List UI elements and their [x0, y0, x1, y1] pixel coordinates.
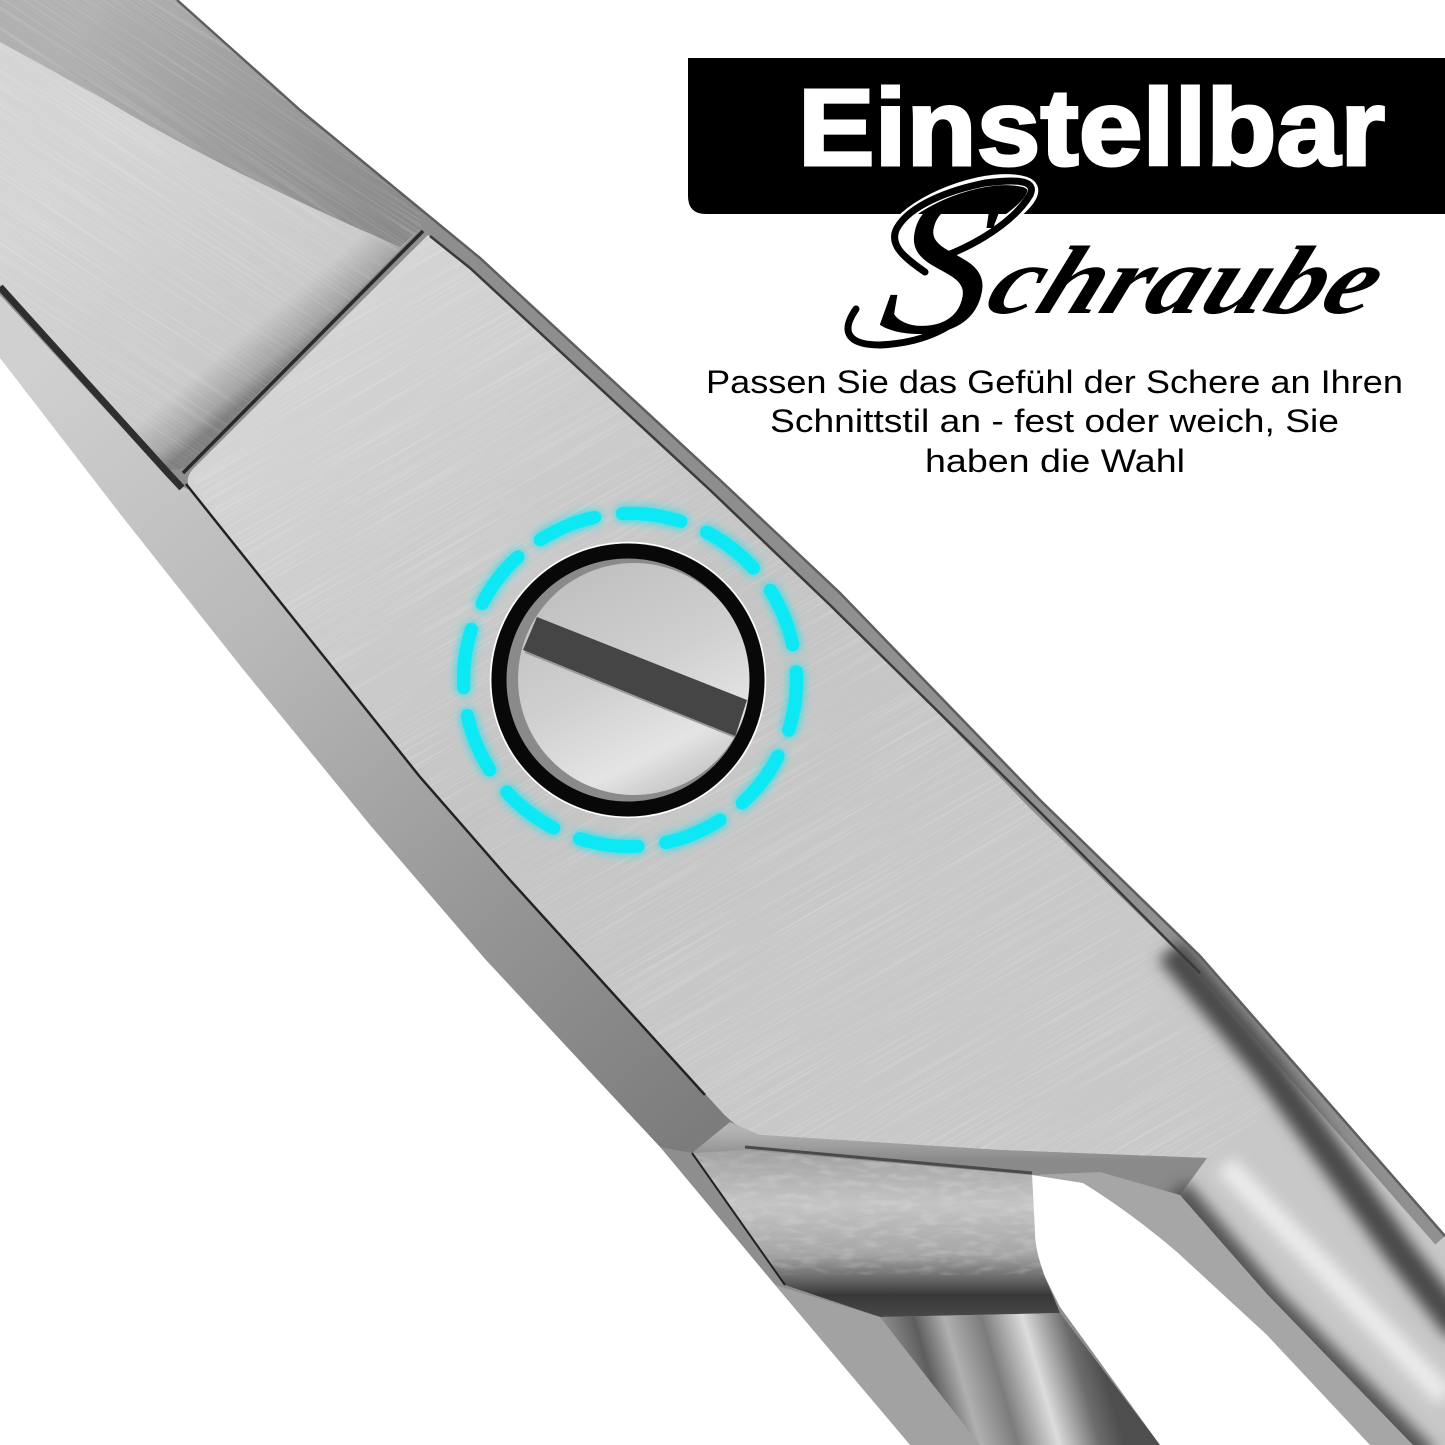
right handle inner bevel: [1032, 1172, 1413, 1445]
screw slot highlight: [525, 652, 735, 737]
title text: Einstellbar: [798, 67, 1385, 189]
strip below plate: [692, 1122, 1207, 1195]
blade ridge line: [183, 231, 423, 473]
lower valley shadow: [1175, 1190, 1425, 1445]
adjustable screw: [490, 542, 766, 818]
thin white ring highlight: [490, 542, 766, 818]
outer grey strip: [939, 714, 1445, 1244]
blade flat surface: [0, 42, 421, 470]
left handle outer bevel: [775, 1285, 980, 1445]
blade brushed texture: [0, 0, 421, 469]
plate lower edge line: [186, 484, 705, 1095]
script lowercase letters: chraube: [973, 228, 1401, 335]
top edge outer line: [177, 0, 1445, 1236]
description line 2: Schnittstil an - fest oder weich, Sie: [770, 403, 1339, 439]
screw head face: [518, 563, 750, 795]
script tail flourish: [848, 305, 968, 345]
wedge hammered texture: [696, 1154, 1044, 1275]
lower left bevel facet: [0, 295, 745, 1153]
plate upper inset dark line: [430, 236, 1200, 973]
blade groove dark line: [0, 287, 182, 488]
textured wedge below the plate: [692, 1150, 1060, 1317]
screw slot: [523, 617, 747, 737]
script capital S: S: [868, 149, 1016, 377]
right arm shading: [939, 714, 1445, 1445]
wedge outer dark edge: [692, 1153, 785, 1285]
title banner: [688, 58, 1445, 214]
upper blade dark bevel: [0, 0, 421, 247]
right handle arm: [1150, 925, 1445, 1445]
cyan dashed highlight ring: [456, 506, 804, 854]
central highlight: [1225, 1165, 1445, 1397]
upper dark shadow: [1170, 950, 1445, 1330]
screw recess: [503, 555, 753, 805]
page white below silhouette: [0, 358, 910, 1445]
black banner: [688, 58, 1445, 214]
description line 1: Passen Sie das Gefühl der Schere an Ihren: [706, 364, 1403, 400]
scissor plate surface: [188, 235, 1285, 1158]
description text: [706, 364, 1403, 479]
script top loop flourish outline: [893, 180, 1033, 275]
black ring around screw: [499, 551, 757, 809]
description line 3: haben die Wahl: [925, 443, 1185, 479]
crease under plate: [745, 1147, 1032, 1173]
script top loop flourish: [895, 181, 1031, 272]
script subtitle: [848, 149, 1401, 377]
plate brushed texture: [276, 342, 1222, 1156]
left handle rounded shank: [880, 1313, 1160, 1445]
handle gap: [1032, 1175, 1370, 1445]
